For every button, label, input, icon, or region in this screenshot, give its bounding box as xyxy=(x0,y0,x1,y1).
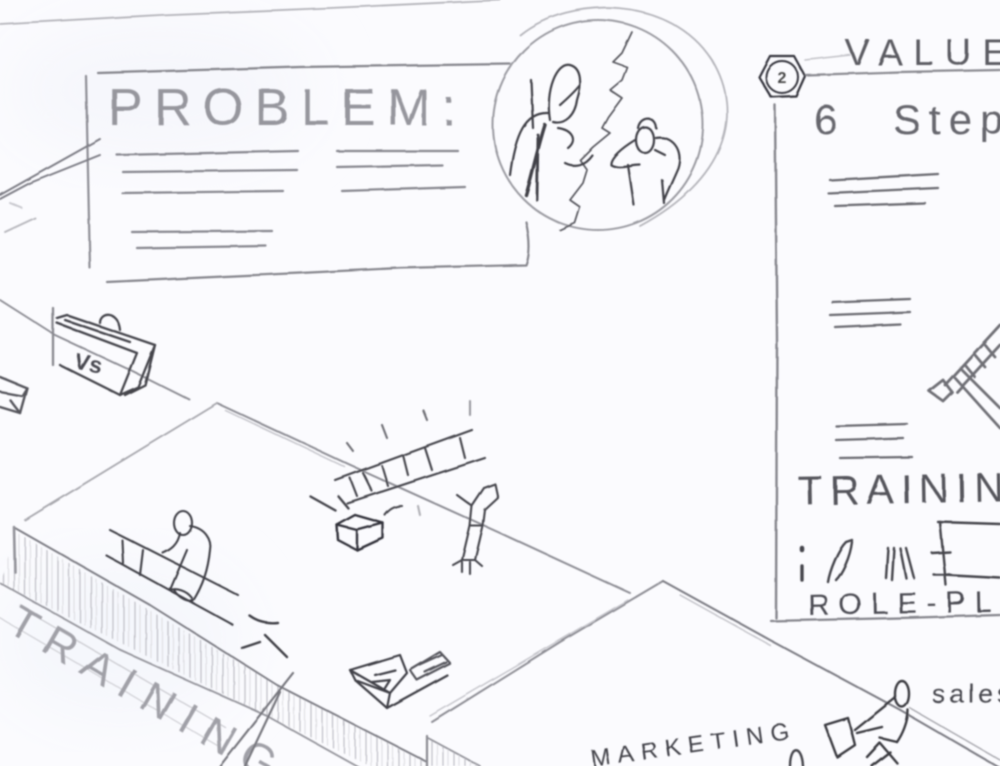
figure: cheering person xyxy=(453,484,498,574)
icon: role-play figures xyxy=(802,522,1000,585)
figure: person on ladder xyxy=(107,511,238,625)
panel: problem xyxy=(86,64,529,282)
panel: marketing platform xyxy=(427,581,1000,766)
figure: salesperson xyxy=(825,681,909,766)
panel: value xyxy=(759,32,1000,622)
platform: background path xyxy=(0,300,190,400)
icon: box xyxy=(337,515,383,550)
icon: arch marker xyxy=(790,750,803,766)
icon: ladder in value panel xyxy=(929,325,1000,428)
icon: conflict circle xyxy=(493,8,727,230)
arrow: crossing lines xyxy=(220,673,293,766)
icon: vs briefcase: Vs xyxy=(72,347,105,379)
icon: vs briefcase xyxy=(53,308,155,395)
top page edge line xyxy=(0,0,500,24)
icon: step 2 badge xyxy=(759,56,805,97)
icon: step 2 badge: 2 xyxy=(778,70,787,87)
icon: ladder lifted with radiating ticks xyxy=(310,401,485,515)
text block: problem notes xyxy=(117,151,465,248)
icon: open box xyxy=(350,652,450,708)
figure: left person xyxy=(510,65,592,200)
arrow: pointer to problem panel xyxy=(0,139,100,232)
icon: partial object at left edge xyxy=(0,377,27,413)
text block: value notes xyxy=(828,174,938,458)
heading: problem: PROBLEM: xyxy=(108,79,456,137)
figure: right person xyxy=(611,119,680,205)
panel: training platform xyxy=(0,401,498,766)
icon: burst marks xyxy=(242,616,287,657)
